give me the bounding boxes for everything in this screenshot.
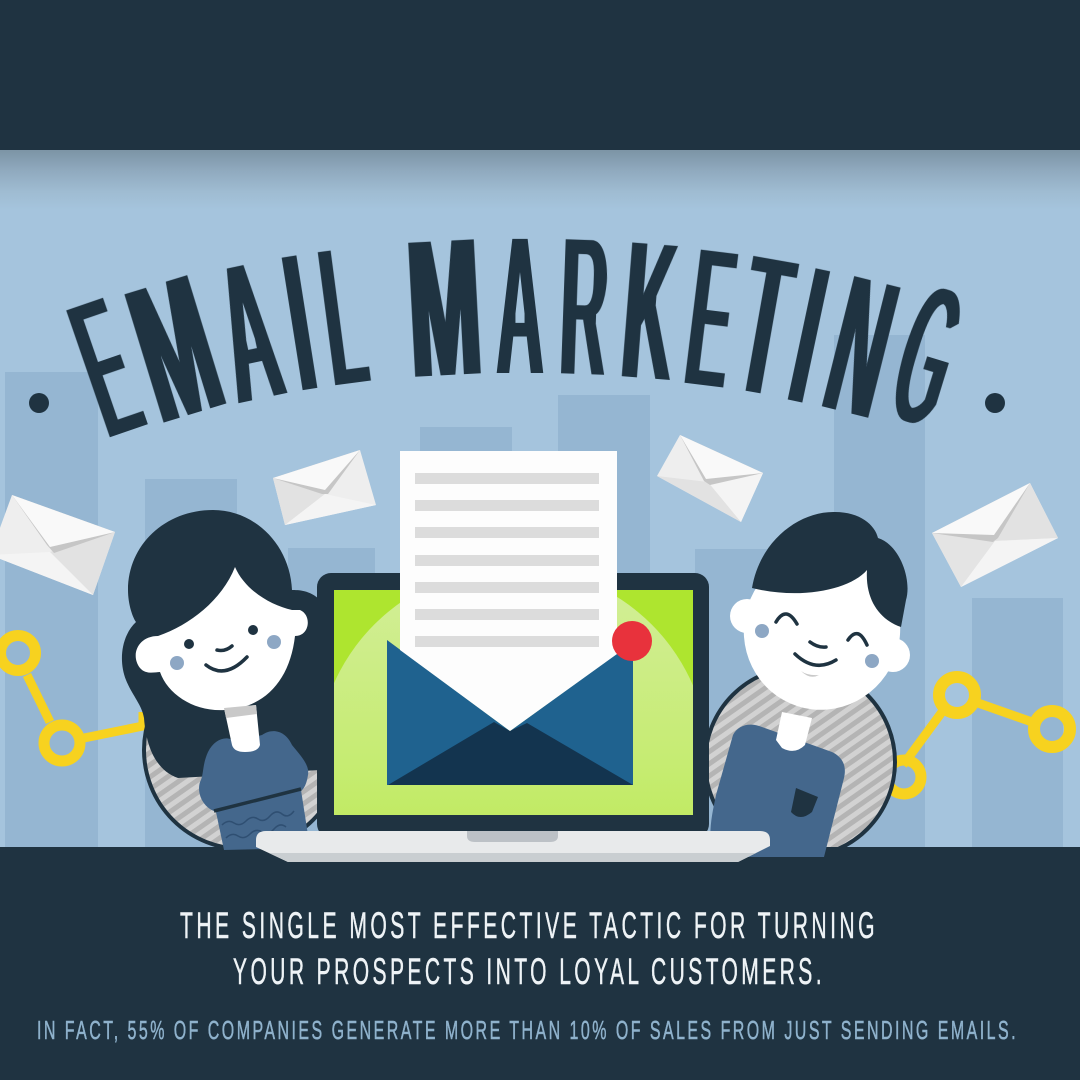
icon: envelope 1 xyxy=(0,495,115,595)
title: Email Marketing: E xyxy=(676,200,746,436)
title dot right xyxy=(985,393,1005,413)
hair xyxy=(752,512,908,627)
title: Email Marketing: A xyxy=(496,189,544,422)
title: Email Marketing: I xyxy=(776,220,842,451)
top shadow xyxy=(0,150,1080,210)
title: Email Marketing: E xyxy=(48,251,164,484)
cheeks xyxy=(755,624,879,668)
title dot left xyxy=(29,393,49,413)
face xyxy=(723,530,921,730)
icon: envelope 2 xyxy=(273,450,376,525)
sky background xyxy=(0,150,1080,850)
skyline bars xyxy=(5,335,1063,848)
eyes xyxy=(184,625,258,649)
neck xyxy=(776,712,812,751)
sweater waistband xyxy=(216,790,310,850)
body xyxy=(710,725,845,857)
left line chart xyxy=(0,636,143,761)
title: Email Marketing: N xyxy=(807,229,915,467)
striped circle xyxy=(709,675,897,847)
icon: envelope 3 xyxy=(657,435,763,522)
envelope front xyxy=(388,722,633,785)
icon: envelope 4 xyxy=(932,483,1058,587)
title: Email Marketing: I xyxy=(272,206,327,439)
laptop screen xyxy=(334,590,693,815)
neck shadow xyxy=(224,705,257,718)
title: Email Marketing: L xyxy=(309,198,377,434)
ears xyxy=(730,599,910,672)
character: man xyxy=(705,512,921,857)
title: Email Marketing xyxy=(48,189,985,484)
title: Email Marketing: T xyxy=(723,207,806,444)
nose and smile xyxy=(795,642,836,665)
top bar xyxy=(0,0,1080,150)
paper xyxy=(400,451,617,731)
face xyxy=(136,567,308,710)
title: Email Marketing: G xyxy=(870,237,985,474)
bottom band xyxy=(0,847,1080,1080)
chin shadow xyxy=(801,671,819,677)
laptop base xyxy=(256,831,770,862)
laptop screen frame xyxy=(317,573,709,838)
screen glow xyxy=(334,597,693,815)
envelope back xyxy=(387,640,633,785)
sweater waves xyxy=(222,811,294,838)
title: Email Marketing: R xyxy=(557,190,612,424)
cheeks xyxy=(170,635,281,670)
sweater xyxy=(199,731,308,812)
title: Email Marketing: K xyxy=(616,192,685,429)
character: woman xyxy=(122,510,317,850)
eyes xyxy=(776,614,867,645)
paper text lines xyxy=(415,473,599,647)
title: Email Marketing: A xyxy=(200,212,298,451)
hair xyxy=(122,510,320,778)
pocket xyxy=(791,788,818,817)
title: Email Marketing: M xyxy=(403,189,486,426)
waistband line xyxy=(214,789,301,811)
nose and smile xyxy=(206,646,247,671)
striped circle xyxy=(142,726,317,847)
neck xyxy=(224,705,260,752)
right line chart xyxy=(887,677,1070,794)
title: Email Marketing: M xyxy=(107,227,243,470)
notification dot xyxy=(612,621,652,661)
